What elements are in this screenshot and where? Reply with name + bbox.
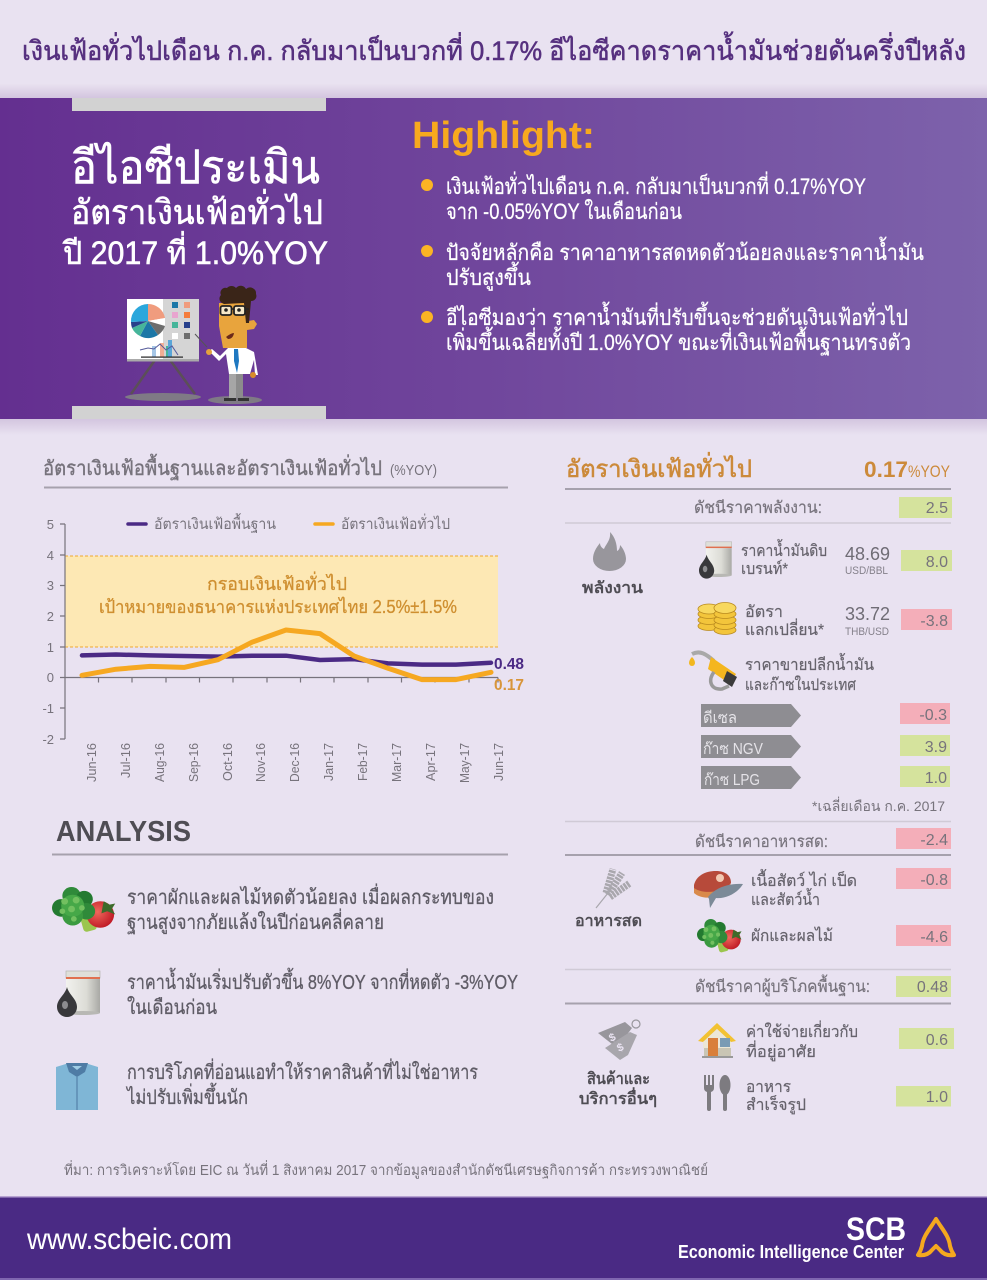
x axis labels: Feb-17 [355, 743, 370, 781]
core inflation line [82, 654, 491, 665]
row: ready-to-eat food: 1.0 [926, 1089, 948, 1106]
panel: energy [565, 497, 952, 814]
icon: oil barrel [699, 542, 732, 579]
text block: highlight bullets: อีไอซีมองว่า ราคาน้ำมันที่ปรับขึ้นจะช่วยดันเงินเฟ้อทั่วไป [446, 302, 908, 330]
analysis item: vegetables: ฐานสูงจากภัยแล้งในปีก่อนคลี่คลาย [127, 908, 384, 935]
row: brent: 48.69 [845, 543, 890, 564]
analysis item: vegetables: ราคาผักและผลไม้หดตัวน้อยลง เมื่อผลกระทบของ [127, 883, 494, 909]
analysis item: vegetables [52, 883, 494, 935]
y axis labels: 1 [47, 640, 54, 655]
text block: highlight bullets: จาก -0.05%YOY ในเดือนก่อน [446, 199, 682, 224]
row: housing: ที่อยู่อาศัย [746, 1040, 816, 1062]
y axis labels: 2 [47, 609, 54, 624]
analysis item: consumption [56, 1058, 478, 1110]
value: energy index [899, 497, 952, 518]
row: vegetables: ผักและผลไม้ [751, 926, 833, 945]
analysis item: oil [57, 968, 518, 1019]
end labels: 0.48 [494, 656, 524, 673]
heading: headline inflation table [566, 452, 950, 483]
icon: price tags: $ [615, 1041, 626, 1055]
footer [0, 1196, 987, 1280]
text block: highlight bullets: เงินเฟ้อทั่วไปเดือน ก.ค. กลับมาเป็นบวกที่ 0.17%YOY [446, 171, 866, 199]
row: meat: -0.8 [920, 872, 948, 889]
panel: core CPI: บริการอื่นๆ [579, 1087, 657, 1108]
heading: EIC assessment: อัตราเงินเฟ้อทั่วไป [71, 189, 323, 232]
heading: headline inflation table: 0.17 [864, 457, 908, 482]
source note: ที่มา: การวิเคราะห์โดย EIC ณ วันที่ 1 สิงหาคม 2017 จากข้อมูลของสำนักดัชนีเศรษฐกิจการค้า กระทรวงพาณิชย์ [64, 1160, 708, 1179]
x axis labels: Oct-16 [220, 743, 235, 781]
axes [60, 524, 498, 739]
heading: EIC assessment: ปี 2017 ที่ 1.0%YOY [62, 231, 328, 271]
icon: vegetables [697, 919, 742, 953]
x axis labels: Jun-16 [84, 743, 99, 782]
row: LPG: ก๊าซ LPG [704, 772, 760, 789]
y axis labels: -2 [42, 732, 54, 747]
icon: vegetables [52, 887, 115, 932]
row: NGV: 3.9 [925, 739, 947, 756]
y axis labels: -1 [42, 701, 54, 716]
panel: fresh food: ดัชนีราคาอาหารสด: [695, 833, 828, 851]
heading: EIC assessment [62, 141, 328, 271]
row: vegetables [697, 919, 951, 953]
panel: purple summary band [0, 98, 987, 419]
icon: SCB logo [918, 1219, 954, 1255]
brand name [678, 1211, 906, 1262]
row: NGV [701, 735, 950, 758]
row: housing [698, 1020, 954, 1062]
x axis labels: Mar-17 [389, 743, 404, 782]
analysis item: oil: ในเดือนก่อน [127, 996, 217, 1019]
website: www.scbeic.com [26, 1223, 232, 1256]
x axis labels: Nov-16 [253, 743, 268, 782]
row: LPG [701, 766, 950, 789]
row: brent [699, 539, 952, 579]
row: brent: เบรนท์* [741, 559, 788, 578]
row: retail fuel: และก๊าซในประเทศ [745, 675, 856, 694]
icon: price tags: $ [607, 1031, 618, 1045]
target band: กรอบเงินเฟ้อทั่วไป [207, 571, 347, 594]
row: exchange rate: อัตรา [745, 604, 783, 621]
row: exchange rate: THB/USD [845, 626, 889, 638]
target band [65, 556, 498, 647]
text block: highlight bullets: ปรับสูงขึ้น [446, 262, 531, 291]
footnote: *เฉลี่ยเดือน ก.ค. 2017 [812, 797, 945, 814]
row: vegetables: -4.6 [920, 929, 948, 946]
analysis item: oil: ราคาน้ำมันเริ่มปรับตัวขึ้น 8%YOY จากที่หดตัว -3%YOY [127, 968, 518, 994]
row: NGV: ก๊าซ NGV [703, 741, 764, 758]
row: housing: 0.6 [926, 1032, 948, 1049]
x axis labels: Jun-17 [491, 743, 506, 781]
panel: core CPI [565, 974, 954, 1115]
target band: เป้าหมายของธนาคารแห่งประเทศไทย 2.5%±1.5% [99, 596, 457, 617]
icon: flame [593, 532, 626, 571]
heading: Highlight: Highlight: [412, 115, 595, 157]
row: brent: ราคาน้ำมันดิบ [741, 539, 827, 560]
icon: price tags [598, 1020, 640, 1060]
legend [128, 513, 450, 533]
panel: core CPI: 0.48 [917, 979, 948, 996]
panel: energy: ดัชนีราคาพลังงาน: [694, 499, 822, 517]
icon: presenter with chart board [125, 286, 262, 404]
row: retail fuel [689, 652, 874, 694]
y axis labels: 0 [47, 670, 54, 685]
icon: wheat [596, 869, 630, 908]
text block: highlight bullets [421, 171, 924, 356]
row: brent: 8.0 [926, 554, 948, 571]
panel: core CPI: สินค้าและ [587, 1070, 650, 1088]
analysis item: consumption: การบริโภคที่อ่อนแอทำให้ราคาสินค้าที่ไม่ใช่อาหาร [127, 1058, 478, 1084]
row: exchange rate [698, 602, 952, 639]
row: diesel [701, 703, 950, 727]
panel: energy: พลังงาน [582, 579, 643, 597]
row: retail fuel: ราคาขายปลีกน้ำมัน [745, 653, 874, 674]
panel: fresh food [565, 828, 951, 953]
line chart [42, 513, 524, 783]
icon: house [698, 1023, 736, 1058]
row: meat: เนื้อสัตว์ ไก่ เป็ด [751, 869, 857, 890]
row: meat [694, 868, 951, 909]
panel: fresh food: อาหารสด [575, 913, 642, 930]
row: exchange rate: 33.72 [845, 603, 890, 624]
row: ready-to-eat food [704, 1075, 951, 1115]
x axis labels: Dec-16 [287, 743, 302, 782]
row: meat: และสัตว์น้ำ [751, 888, 820, 909]
x axis labels: May-17 [457, 743, 472, 783]
row: housing: ค่าใช้จ่ายเกี่ยวกับ [746, 1020, 858, 1041]
icon: fork and spoon [704, 1075, 730, 1111]
row: ready-to-eat food: สำเร็จรูป [746, 1094, 806, 1115]
row: brent: USD/BBL [845, 565, 888, 577]
row: exchange rate: แลกเปลี่ยน* [745, 618, 824, 639]
text block: highlight bullets: เพิ่มขึ้นเฉลี่ยทั้งปี 1.0%YOY ขณะที่เงินเฟ้อพื้นฐานทรงตัว [446, 327, 911, 356]
y axis labels: 5 [47, 517, 54, 532]
y axis labels [42, 517, 54, 747]
x axis labels: Sep-16 [186, 743, 201, 782]
heading: headline inflation table: อัตราเงินเฟ้อทั่วไป [566, 452, 752, 483]
legend: อัตราเงินเฟ้อทั่วไป [341, 513, 450, 533]
row: LPG: 1.0 [925, 770, 947, 787]
x axis labels: Jul-16 [118, 743, 133, 778]
row: exchange rate: -3.8 [920, 613, 948, 630]
row: diesel: ดีเซล [703, 710, 737, 727]
x axis labels: Apr-17 [423, 743, 438, 781]
heading: EIC assessment: อีไอซีประเมิน [71, 141, 320, 193]
x axis labels: Jan-17 [321, 743, 336, 781]
analysis item: consumption: ไม่ปรับเพิ่มขึ้นนัก [125, 1083, 248, 1109]
icon: shirt [56, 1063, 98, 1110]
x axis labels: Aug-16 [152, 743, 167, 782]
headline inflation line [82, 630, 491, 680]
heading: analysis: ANALYSIS [56, 816, 191, 848]
brand name: Economic Intelligence Center [678, 1241, 904, 1262]
y axis labels: 4 [47, 548, 54, 563]
text block: highlight bullets: ปัจจัยหลักคือ ราคาอาหารสดหดตัวน้อยลงและราคาน้ำมัน [446, 237, 924, 265]
row: ready-to-eat food: อาหาร [746, 1079, 791, 1096]
y axis labels: 3 [47, 578, 54, 593]
icon: oil barrel [57, 971, 100, 1017]
heading: headline inflation table: %YOY [908, 462, 950, 481]
icon: coins [698, 602, 736, 634]
legend: อัตราเงินเฟ้อพื้นฐาน [154, 513, 276, 533]
brand name: SCB [846, 1211, 906, 1247]
panel: fresh food: -2.4 [920, 832, 948, 849]
row: diesel: -0.3 [919, 707, 947, 724]
heading: chart title: (%YOY) [390, 462, 437, 479]
heading: chart title: อัตราเงินเฟ้อพื้นฐานและอัตราเงินเฟ้อทั่วไป [43, 454, 382, 480]
panel: core CPI: ดัชนีราคาผู้บริโภคพื้นฐาน: [695, 974, 870, 997]
icon: meat and fish [694, 871, 743, 908]
value: energy index: 2.5 [926, 500, 948, 517]
icon: fuel nozzle [689, 652, 737, 689]
x axis labels [84, 743, 506, 783]
line chart: 0.17 [494, 677, 524, 694]
